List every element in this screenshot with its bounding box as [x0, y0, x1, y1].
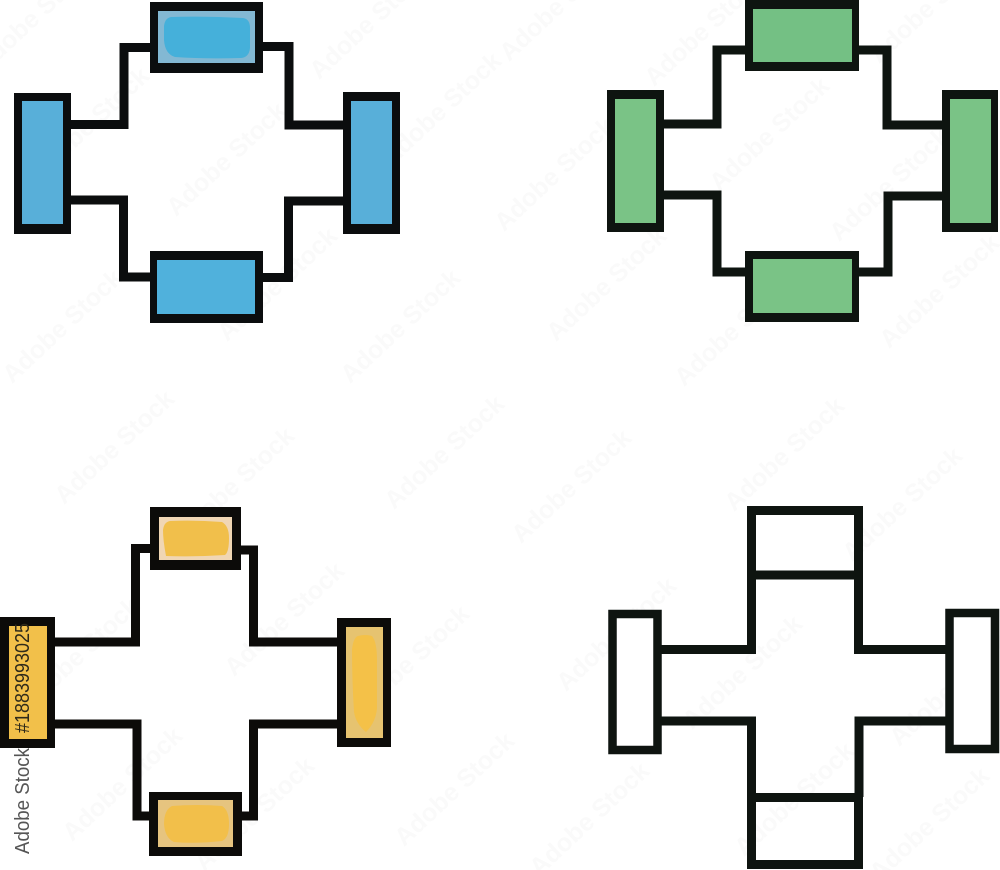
background watermark: Adobe Stock [669, 267, 800, 391]
box: yellow left [0, 617, 55, 748]
diagram: yellow [0, 507, 391, 856]
box: green top [745, 0, 859, 71]
background watermark: Adobe Stock [729, 737, 860, 861]
background watermark: Adobe Stock [541, 222, 672, 346]
background watermark: Adobe Stock [376, 47, 507, 171]
background watermark: Adobe Stock [506, 424, 637, 548]
background watermark: Adobe Stock [824, 122, 955, 246]
diagram: green [607, 0, 998, 322]
box: green left [607, 90, 664, 232]
background watermark: Adobe Stock [219, 557, 350, 681]
background watermark: Adobe Stock [169, 422, 300, 546]
background watermark: Adobe Stock [57, 722, 188, 846]
diagram: blue [14, 2, 400, 323]
connectors: green [662, 50, 944, 272]
background watermark: Adobe Stock [344, 600, 475, 724]
box: outline top [752, 510, 858, 575]
background watermark: Adobe Stock [335, 264, 466, 388]
box: outline right [950, 613, 995, 749]
box: yellow bottom [149, 792, 242, 856]
background watermark: Adobe Stock [677, 610, 808, 734]
background watermark: Adobe Stock [14, 592, 145, 716]
connectors: outline [660, 575, 947, 797]
background watermark: Adobe Stock [379, 390, 510, 514]
background watermark: Adobe Stock [24, 62, 155, 186]
background watermark: Adobe Stock [704, 72, 835, 196]
box: yellow top [150, 507, 241, 570]
background watermark: Adobe Stock [0, 264, 128, 388]
background watermark: Adobe Stock [389, 727, 520, 851]
id number: #1883993025 [12, 623, 34, 733]
background watermark: Adobe Stock [212, 222, 343, 346]
box: yellow right [337, 618, 391, 747]
box: green bottom [745, 251, 859, 322]
connectors: yellow [53, 548, 339, 816]
box: blue right [343, 92, 400, 234]
connectors: blue [69, 46, 345, 278]
background watermark: Adobe Stock [161, 97, 292, 221]
box: blue left [14, 93, 71, 234]
background watermark: Adobe Stock [837, 442, 968, 566]
box: outline bottom [752, 798, 858, 864]
box: blue top [150, 2, 263, 73]
stock label: Adobe Stock [12, 747, 34, 854]
box: blue bottom [150, 251, 263, 323]
diagram: outline [612, 510, 995, 864]
background watermark: Adobe Stock [49, 385, 180, 509]
background watermark: Adobe Stock [489, 112, 620, 236]
background watermark: Adobe Stock [719, 392, 850, 516]
stock id text [12, 623, 34, 854]
background watermark: Adobe Stock [551, 572, 682, 696]
box: outline left [612, 614, 658, 750]
box: green right [942, 90, 998, 232]
